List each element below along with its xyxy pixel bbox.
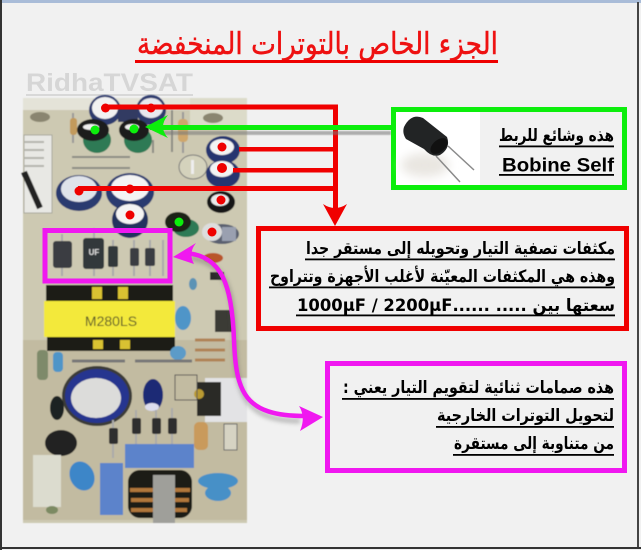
text: bobine label: هذه وشائع للربط xyxy=(499,126,614,146)
connector and fuse area xyxy=(33,455,61,514)
text: diodes description xyxy=(342,378,614,456)
text: bobine label xyxy=(499,126,615,176)
text: bobine label: Bobine Self xyxy=(502,156,615,176)
red arrowhead xyxy=(323,204,347,226)
resistors xyxy=(70,110,207,179)
top capacitors xyxy=(89,95,166,125)
varistor xyxy=(45,396,77,456)
icon: inductor photo xyxy=(396,112,480,185)
text: diodes description: لتحويل التوترات الخارجية xyxy=(437,406,614,426)
common mode choke xyxy=(128,470,192,523)
circuit board photo xyxy=(23,95,247,523)
transformer xyxy=(44,285,175,351)
inductors xyxy=(77,119,199,237)
blue film capacitors xyxy=(65,444,238,515)
green marker dots xyxy=(90,124,184,226)
watermark: RidhaTVSAT xyxy=(26,69,193,97)
diode highlight box xyxy=(45,230,170,281)
mid small parts xyxy=(37,253,233,380)
diode group xyxy=(53,228,163,276)
lower diodes xyxy=(109,408,237,458)
title: الجزء الخاص بالتوترات المنخفضة xyxy=(137,27,498,62)
mounting holes xyxy=(30,112,223,123)
text: capacitors description xyxy=(269,239,615,316)
text: capacitors description: سعتها بين ..... ......1000µF / 2200µF xyxy=(297,296,615,316)
red connector lines xyxy=(78,104,347,226)
diode group: UF xyxy=(89,248,99,257)
connector xyxy=(24,135,52,213)
panel: capacitors xyxy=(258,228,626,328)
right capacitors xyxy=(202,136,240,244)
main filter capacitor xyxy=(62,366,163,426)
large capacitors xyxy=(56,173,154,238)
green connector arrow xyxy=(145,115,391,138)
red marker dots xyxy=(74,104,227,236)
panel: bobine xyxy=(394,110,624,188)
panel: diodes xyxy=(328,364,624,470)
magenta double arrow xyxy=(173,243,323,431)
heat sink and regulator xyxy=(175,375,247,422)
transformer: M280LS xyxy=(85,313,137,329)
